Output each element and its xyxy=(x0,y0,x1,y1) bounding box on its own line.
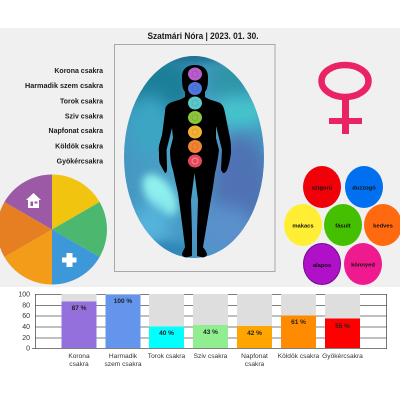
icon: house xyxy=(26,193,41,208)
chakra name list xyxy=(25,68,103,166)
category labels: Sziv csakra xyxy=(194,353,228,360)
body silhouette xyxy=(159,65,231,257)
y axis labels: 60 xyxy=(22,313,30,320)
category labels: Harmadik xyxy=(109,353,138,360)
bubble: könnyed: könnyed xyxy=(351,262,375,268)
bar values: 42 % xyxy=(247,330,262,337)
bars xyxy=(62,294,360,348)
category labels: csakra xyxy=(69,361,89,368)
bar values: 61 % xyxy=(291,319,306,326)
panel: aura picture frame xyxy=(114,44,275,272)
personality bubbles xyxy=(284,166,400,285)
y axis labels: 20 xyxy=(22,335,30,342)
icon: female symbol xyxy=(322,65,368,134)
icon: plus xyxy=(62,253,76,267)
chakra name list: Napfonat csakra xyxy=(49,128,103,135)
category labels: Korona xyxy=(68,353,90,360)
bubble: alapos: alapos xyxy=(313,263,331,269)
bar values: 40 % xyxy=(159,330,174,337)
bar values xyxy=(72,298,350,337)
category labels: Gyökércsakra xyxy=(322,353,363,360)
chakra points xyxy=(188,68,202,168)
title: Szatmári Nóra | 2023. 01. 30. xyxy=(148,31,258,41)
bubble: kedves: kedves xyxy=(373,224,393,230)
bubble: fásult: fásult xyxy=(335,224,351,230)
aura oval xyxy=(124,56,264,258)
chakra name list: Korona csakra xyxy=(54,68,103,75)
bar chart xyxy=(18,292,387,368)
chakra name list: Köldök csakra xyxy=(55,144,103,150)
y axis labels xyxy=(18,292,30,352)
y axis labels: 0 xyxy=(26,346,30,352)
category labels: Köldök csakra xyxy=(278,353,320,360)
bar values: 43 % xyxy=(203,329,218,336)
y axis labels: 100 xyxy=(18,292,30,298)
bubble: makacs: makacs xyxy=(292,224,314,230)
pie wheel xyxy=(0,174,107,284)
y axis labels: 80 xyxy=(22,302,30,310)
category labels: Napfonat xyxy=(241,353,268,360)
bar values: 87 % xyxy=(72,305,87,312)
category labels: csakra xyxy=(245,361,265,368)
chakra name list: Sziv csakra xyxy=(65,114,103,120)
chakra name list: Harmadik szem csakra xyxy=(25,83,103,90)
chakra name list: Torok csakra xyxy=(60,98,103,106)
category labels xyxy=(68,353,363,368)
bubble: szigorú: szigorú xyxy=(312,186,333,192)
category labels: Torok csakra xyxy=(148,353,186,360)
bar values: 100 % xyxy=(114,298,132,305)
bar values: 55 % xyxy=(335,323,350,330)
y axis labels: 40 xyxy=(22,324,30,331)
bubble: duzzogó: duzzogó xyxy=(352,186,376,192)
category labels: szem csakra xyxy=(104,361,142,368)
chakra name list: Gyökércsakra xyxy=(57,158,103,166)
